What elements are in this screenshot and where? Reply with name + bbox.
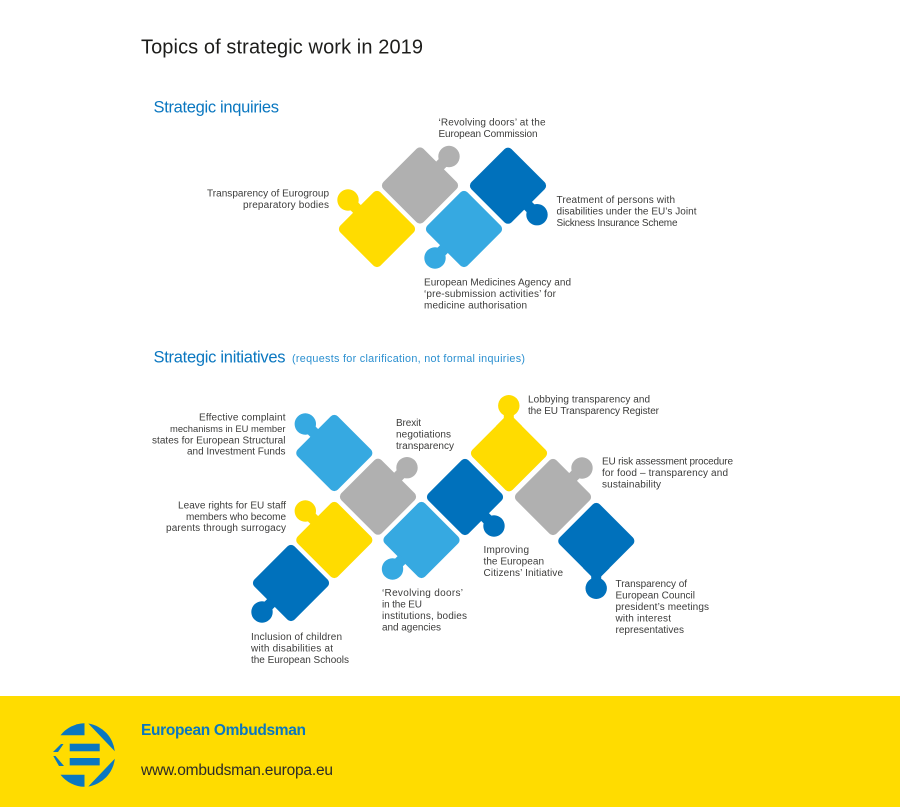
label: European Medicines Agency: medicine authorisation xyxy=(424,300,527,312)
label: effective complaint mechanisms: and Investment Funds xyxy=(187,446,286,458)
label: revolving doors at the Commission: European Commission xyxy=(438,129,538,140)
label: leave rights: members who become xyxy=(186,512,286,523)
label: EU risk assessment: for food – transparency and xyxy=(602,468,728,479)
label: revolving doors at the Commission xyxy=(438,118,546,140)
label: European Council president: with interest xyxy=(614,614,671,624)
title: Topics of strategic work in 2019 xyxy=(141,36,423,58)
label: Brexit: Brexit xyxy=(396,418,421,429)
heading: strategic initiatives xyxy=(154,348,525,366)
label: European Medicines Agency: ‘pre-submission activities’ for xyxy=(424,289,557,300)
icon: yellow puzzle piece xyxy=(320,172,417,269)
label: effective complaint mechanisms: states for European Structural xyxy=(152,436,286,446)
label: European Council president: president’s meetings xyxy=(616,602,709,613)
heading: strategic initiatives: (requests for clarification, not formal inquiries) xyxy=(292,353,525,365)
label: joint sickness insurance scheme: Sickness Insurance Scheme xyxy=(556,218,678,229)
panel: footer band xyxy=(0,696,900,807)
icon: light blue puzzle piece xyxy=(407,189,504,286)
label: revolving doors in the EU institutions: institutions, bodies xyxy=(382,611,467,622)
label: inclusion of children: the European Schools xyxy=(251,655,349,666)
label: revolving doors in the EU institutions xyxy=(382,588,467,634)
label: improving citizens initiative: Citizens’ Initiative xyxy=(484,568,563,579)
label: European Council president: Transparency of xyxy=(616,579,687,590)
label: effective complaint mechanisms xyxy=(152,412,286,458)
icon: dark blue piece, European Council president xyxy=(556,501,636,599)
label: improving citizens initiative: Improving xyxy=(484,545,529,556)
label: revolving doors in the EU institutions: ‘Revolving doors’ xyxy=(382,588,463,599)
icon: dark blue puzzle piece xyxy=(468,146,565,242)
label: joint sickness insurance scheme: disabilities under the EU’s Joint xyxy=(556,206,697,218)
icon: yellow piece, leave rights xyxy=(278,483,374,580)
icon: light blue piece, complaint mechanisms xyxy=(278,396,374,493)
label: European Medicines Agency: European Medicines Agency and xyxy=(424,278,571,288)
label: joint sickness insurance scheme xyxy=(556,195,697,229)
icon: grey puzzle piece xyxy=(380,129,477,226)
label: lobbying transparency xyxy=(528,394,660,417)
label: inclusion of children: Inclusion of children xyxy=(251,632,342,643)
label: leave rights: parents through surrogacy xyxy=(166,523,286,534)
label: Brexit: transparency xyxy=(396,441,454,452)
label: European Council president xyxy=(614,579,709,636)
label: improving citizens initiative xyxy=(484,545,563,579)
label: improving citizens initiative: the European xyxy=(484,556,544,568)
label: European Council president: European Council xyxy=(616,590,695,602)
label: European Council president: representatives xyxy=(616,625,684,636)
panel: strategic inquiries puzzle xyxy=(320,129,565,286)
label: effective complaint mechanisms: Effective complaint xyxy=(199,412,286,424)
label: inclusion of children: with disabilities at xyxy=(250,644,333,654)
icon: grey piece, Brexit xyxy=(338,440,435,537)
heading: strategic inquiries: Strategic inquiries xyxy=(154,98,279,116)
label: effective complaint mechanisms: mechanisms in EU member xyxy=(170,423,286,434)
label: lobbying transparency: Lobbying transparency and xyxy=(528,394,650,406)
heading: strategic initiatives: Strategic initiatives xyxy=(154,348,286,366)
icon: grey piece, food risk assessment xyxy=(513,440,610,537)
label: revolving doors in the EU institutions: in the EU xyxy=(382,600,422,610)
icon: dark blue piece, inclusion of children xyxy=(234,543,331,640)
label: Brexit: negotiations xyxy=(396,430,451,440)
label: leave rights: Leave rights for EU staff xyxy=(178,500,286,512)
text: website: www.ombudsman.europa.eu xyxy=(140,762,333,779)
label: transparency of Eurogroup xyxy=(207,188,329,211)
label: revolving doors at the Commission: ‘Revolving doors’ at the xyxy=(438,118,546,128)
label: joint sickness insurance scheme: Treatment of persons with xyxy=(556,195,675,206)
icon: light blue piece, revolving doors xyxy=(365,500,462,597)
label: inclusion of children xyxy=(250,632,349,666)
text: organisation name: European Ombudsman xyxy=(141,722,306,739)
label: revolving doors in the EU institutions: and agencies xyxy=(382,622,441,634)
label: European Medicines Agency xyxy=(424,278,571,312)
label: EU risk assessment: EU risk assessment procedure xyxy=(602,456,733,468)
label: EU risk assessment xyxy=(602,456,733,490)
icon: yellow piece, lobbying transparency xyxy=(469,395,549,493)
panel: strategic initiatives puzzle xyxy=(234,395,636,640)
label: EU risk assessment: sustainability xyxy=(602,480,661,490)
label: transparency of Eurogroup: preparatory bodies xyxy=(243,200,329,211)
label: transparency of Eurogroup: Transparency of Eurogroup xyxy=(207,188,329,200)
icon: European Ombudsman logo xyxy=(53,723,115,787)
label: lobbying transparency: the EU Transparency Register xyxy=(528,406,660,417)
label: Brexit xyxy=(396,418,454,452)
icon: dark blue piece, citizens initiative xyxy=(425,457,522,554)
label: leave rights xyxy=(166,500,286,534)
